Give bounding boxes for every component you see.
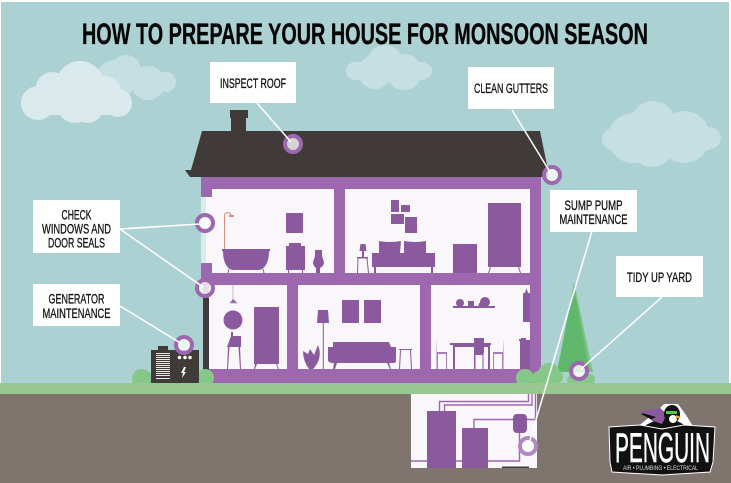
tub feet [228, 269, 264, 273]
callout lines [120, 103, 662, 440]
room: bedroom [345, 189, 530, 273]
exterior gap beside lower floor [201, 285, 203, 383]
label: inspect roof [210, 62, 296, 103]
bathroom furniture [222, 212, 324, 273]
round mirror [224, 310, 242, 330]
bedside lamp [360, 244, 366, 257]
label: check windows and door seals: DOOR SEALS [48, 236, 105, 250]
logo tagline: AIR • PLUMBING • ELECTRICAL [623, 466, 699, 472]
wall cabinet [523, 288, 530, 322]
tank: small [462, 428, 488, 468]
label: inspect roof: INSPECT ROOF [220, 76, 286, 91]
hall furniture [224, 285, 279, 369]
marker: generator [176, 337, 192, 353]
marker: windows [197, 215, 213, 231]
page border [0, 0, 731, 2]
pipes [411, 394, 536, 461]
living room furniture [303, 300, 412, 369]
outer wall cutaway left side [201, 197, 206, 263]
wall pictures [342, 300, 381, 323]
grass [0, 383, 731, 394]
dark wall section [203, 298, 209, 383]
marker: door seals [197, 280, 213, 296]
label: clean gutters [468, 67, 554, 109]
logo badge [609, 425, 715, 475]
wall picture [286, 213, 303, 233]
logo peak outline [636, 404, 694, 428]
roof [185, 131, 548, 177]
generator handle [158, 346, 168, 351]
house walls [201, 177, 541, 383]
label: generator maintenance: MAINTENANCE [42, 306, 110, 321]
wall shelf [453, 306, 495, 308]
logo penguin mascot [639, 405, 690, 428]
middle chair [474, 338, 484, 369]
tank: large [427, 411, 456, 468]
sideboard [519, 338, 530, 369]
bed [372, 241, 435, 273]
label: tidy up yard [616, 256, 703, 297]
tree [557, 282, 593, 372]
sofa [328, 342, 396, 369]
dining room furniture [436, 288, 530, 369]
label: check windows and door seals: WINDOWS AND [42, 222, 111, 236]
potted plant [303, 345, 320, 369]
room: living room [298, 285, 420, 369]
label: sump pump maintenance: SUMP PUMP [564, 198, 622, 213]
vanity [286, 243, 305, 273]
cloud: back left [90, 55, 176, 100]
dining table [450, 343, 491, 369]
generator [151, 346, 199, 383]
cloud: top centre [346, 45, 432, 90]
ground [0, 394, 731, 483]
generator body [151, 350, 199, 383]
console table [227, 332, 241, 369]
wall stub upper [201, 263, 212, 273]
chimney [230, 110, 248, 132]
label: clean gutters: CLEAN GUTTERS [474, 81, 548, 96]
floor drain [502, 466, 529, 468]
markers [176, 136, 587, 454]
shower pipe [224, 212, 231, 249]
house [185, 110, 548, 383]
sump pump [513, 414, 527, 433]
marker: yard [571, 363, 587, 379]
pendant light [230, 285, 237, 303]
bedside table [357, 257, 369, 273]
dresser [453, 244, 477, 273]
tall cabinet [254, 307, 279, 369]
shelf items [456, 297, 490, 308]
left chair [436, 338, 447, 369]
marker: sump pump [520, 438, 536, 454]
label: check windows and door seals [33, 200, 120, 253]
basement [411, 394, 537, 468]
logo: Penguin [609, 404, 715, 475]
bedroom furniture [357, 200, 521, 273]
label: sump pump maintenance: MAINTENANCE [560, 212, 628, 227]
shower head [229, 215, 234, 217]
side table [399, 349, 412, 369]
label: generator maintenance [33, 284, 120, 326]
cloud: front left [21, 61, 132, 123]
marker: gutters [544, 167, 560, 183]
wardrobe [488, 203, 521, 273]
marker: roof [285, 136, 301, 152]
room: dining room [431, 285, 530, 369]
label: generator maintenance: GENERATOR [48, 292, 105, 306]
label: tidy up yard: TIDY UP YARD [627, 270, 692, 285]
generator lights [178, 356, 192, 359]
basement room [411, 394, 537, 468]
right chair [493, 338, 504, 369]
picture frames [391, 200, 417, 233]
bushes [132, 363, 595, 389]
floor lamp [317, 310, 329, 369]
bathtub [222, 249, 270, 270]
clouds [21, 45, 721, 167]
icon: lightning bolt [181, 367, 186, 378]
generator vent [156, 353, 170, 379]
room: bathroom [206, 189, 334, 273]
toilet [313, 250, 324, 273]
cloud: right [602, 101, 721, 167]
room: hall [209, 285, 287, 369]
label: check windows and door seals: CHECK [62, 208, 92, 222]
label: sump pump maintenance [550, 190, 637, 232]
